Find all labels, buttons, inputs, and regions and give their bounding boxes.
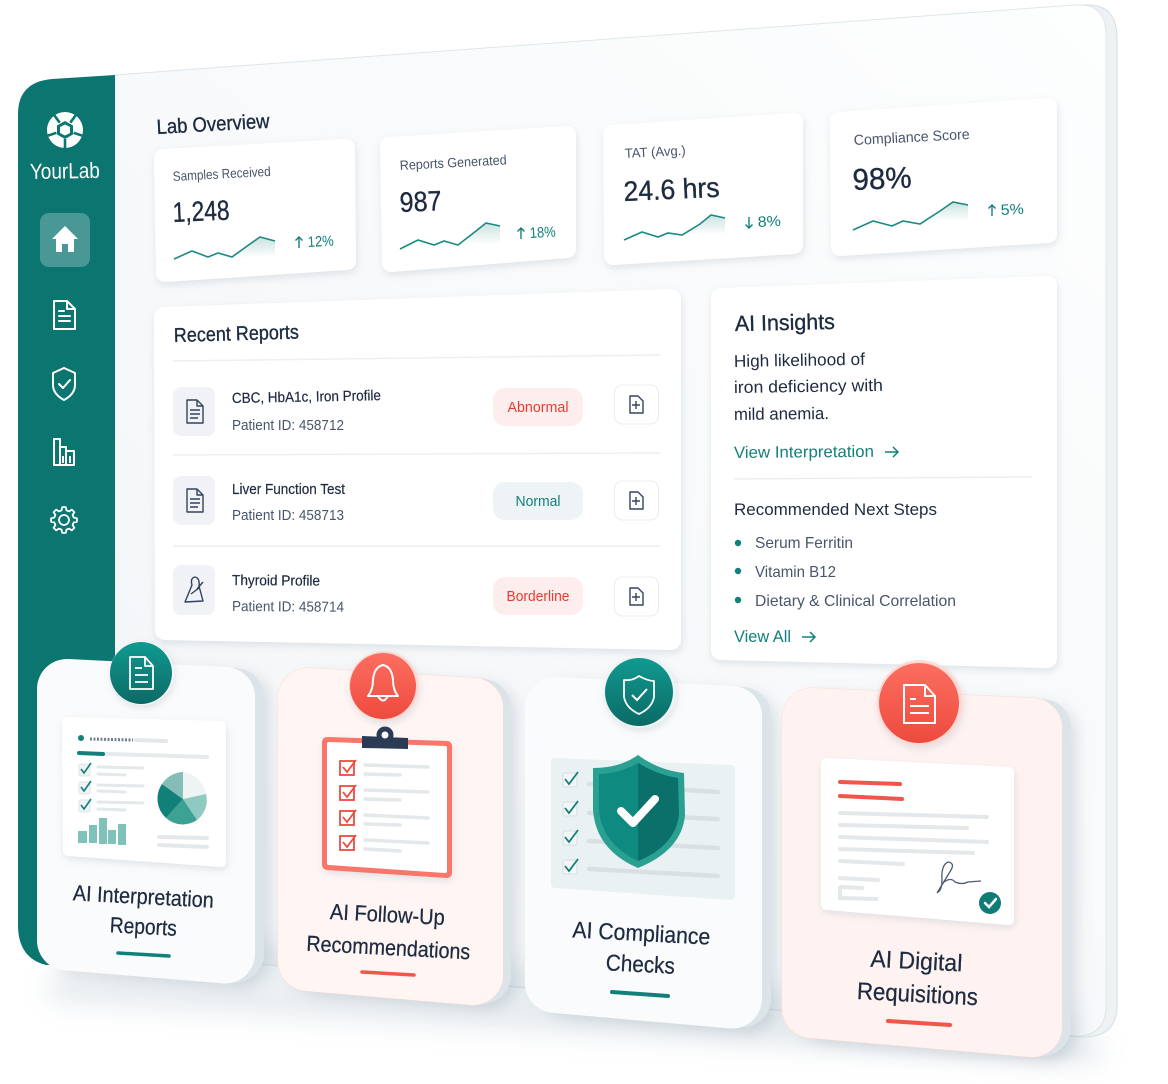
card label: AI Compliance: [572, 916, 711, 950]
icon: doc: [173, 476, 215, 525]
icon: gear: [51, 507, 77, 533]
card label: [572, 916, 711, 979]
button: [614, 385, 658, 424]
pie chart: [157, 772, 207, 824]
change: [988, 201, 1024, 219]
card label: Checks: [605, 949, 676, 979]
change: [518, 224, 556, 242]
panel: Samples Received: [163, 148, 347, 273]
change: 8%: [757, 213, 781, 231]
card label: Recommendations: [306, 931, 471, 964]
bullet list: Vitamin B12: [755, 564, 836, 581]
card label: Requisitions: [856, 978, 979, 1011]
badge: normal: [493, 482, 583, 520]
row title: Liver Function Test: [232, 482, 345, 498]
underline: [612, 992, 668, 996]
change: [746, 213, 781, 231]
sparkline: [400, 223, 500, 249]
bullet list: [735, 535, 956, 610]
icon: document: [54, 301, 75, 329]
badge icon: report: [110, 641, 174, 705]
logo text: YourLab: [30, 158, 100, 184]
value: 987: [399, 185, 442, 218]
badge: abnormal: Abnormal: [508, 400, 568, 416]
underline: [888, 1021, 950, 1025]
change: 18%: [529, 224, 556, 242]
patient id: Patient ID: 458712: [232, 418, 344, 434]
underline: [118, 953, 169, 956]
card label: [72, 880, 214, 941]
icon: bar chart: [54, 439, 74, 465]
panel: AI Insights: [721, 286, 1047, 658]
label: Samples Received: [172, 164, 271, 184]
illustration: report: [67, 722, 221, 862]
insight text: mild anemia.: [734, 404, 829, 424]
insight text: iron deficiency with: [734, 376, 883, 397]
icon: shield: [53, 368, 75, 400]
change: [296, 233, 334, 251]
bullet list: Dietary & Clinical Correlation: [755, 593, 956, 610]
badge: normal: Normal: [516, 494, 560, 510]
button: [614, 577, 658, 616]
icon: YourLab logo: [47, 112, 83, 148]
sparkline: [853, 202, 968, 230]
sparkline: [624, 215, 725, 240]
card: AI Digital Requisitions: [812, 660, 1042, 1027]
insight text: High likelihood of: [734, 350, 865, 371]
patient id: Patient ID: 458714: [232, 599, 344, 616]
value: 1,248: [172, 195, 230, 228]
ground shadow: [50, 975, 1100, 1062]
icon: thyroid: [173, 565, 215, 615]
card label: AI Digital: [870, 946, 963, 977]
row title: CBC, HbA1c, Iron Profile: [232, 388, 381, 407]
bullet list: Serum Ferritin: [755, 535, 853, 552]
check badge: [979, 892, 1001, 914]
bar chart: [78, 818, 126, 845]
card label: Reports: [109, 912, 178, 941]
change: 12%: [307, 233, 334, 251]
card: AI Compliance Checks: [555, 656, 742, 998]
button: [614, 481, 658, 520]
badge icon: document: [877, 660, 963, 746]
label: Reports Generated: [399, 152, 507, 173]
illustration: shield: [593, 755, 685, 868]
row: CBC: [173, 385, 658, 436]
value: 24.6 hrs: [623, 172, 720, 207]
badge: borderline: [493, 577, 583, 615]
illustration: document: [827, 764, 1008, 919]
patient id: Patient ID: 458713: [232, 508, 344, 524]
panel: Recent Reports: [164, 299, 671, 640]
card: AI Follow-Up Recommendations: [306, 651, 482, 975]
card label: [306, 899, 471, 964]
card: AI Interpretation Reports: [67, 641, 235, 956]
value: 98%: [852, 161, 912, 197]
card label: AI Follow-Up: [329, 899, 445, 930]
link: view interpretation: View Interpretation: [734, 443, 874, 462]
heading: Recent Reports: [174, 322, 299, 347]
insight text: [734, 350, 883, 424]
signature: [937, 862, 981, 893]
illustration: checklist: [555, 762, 731, 896]
badge icon: bell: [349, 651, 419, 721]
row title: Thyroid Profile: [232, 573, 320, 590]
card label: AI Interpretation: [72, 880, 214, 913]
link: view all: View All: [734, 628, 791, 646]
illustration: clipboard: [327, 726, 447, 873]
row: Liver: [173, 476, 658, 525]
panel: TAT: [612, 122, 794, 256]
badge: borderline: Borderline: [506, 589, 570, 605]
heading: AI Insights: [735, 309, 835, 336]
badge icon: shield: [604, 656, 676, 728]
heading: Lab Overview: Lab Overview: [156, 110, 270, 139]
icon: doc: [173, 387, 215, 436]
label: TAT (Avg.): [624, 143, 686, 161]
panel: Reports Generated: [389, 135, 567, 263]
sparkline: [174, 237, 275, 259]
underline: [362, 972, 414, 975]
row: Thyroid: [173, 565, 658, 616]
card label: [856, 946, 979, 1011]
icon: home tile: [40, 213, 90, 267]
panel: sidebar: [18, 75, 115, 965]
change: 5%: [1000, 201, 1024, 219]
badge: abnormal: [493, 388, 583, 426]
label: Compliance Score: [853, 127, 970, 149]
subheading: Recommended Next Steps: [734, 500, 937, 519]
panel: Compliance Score: [839, 107, 1048, 247]
